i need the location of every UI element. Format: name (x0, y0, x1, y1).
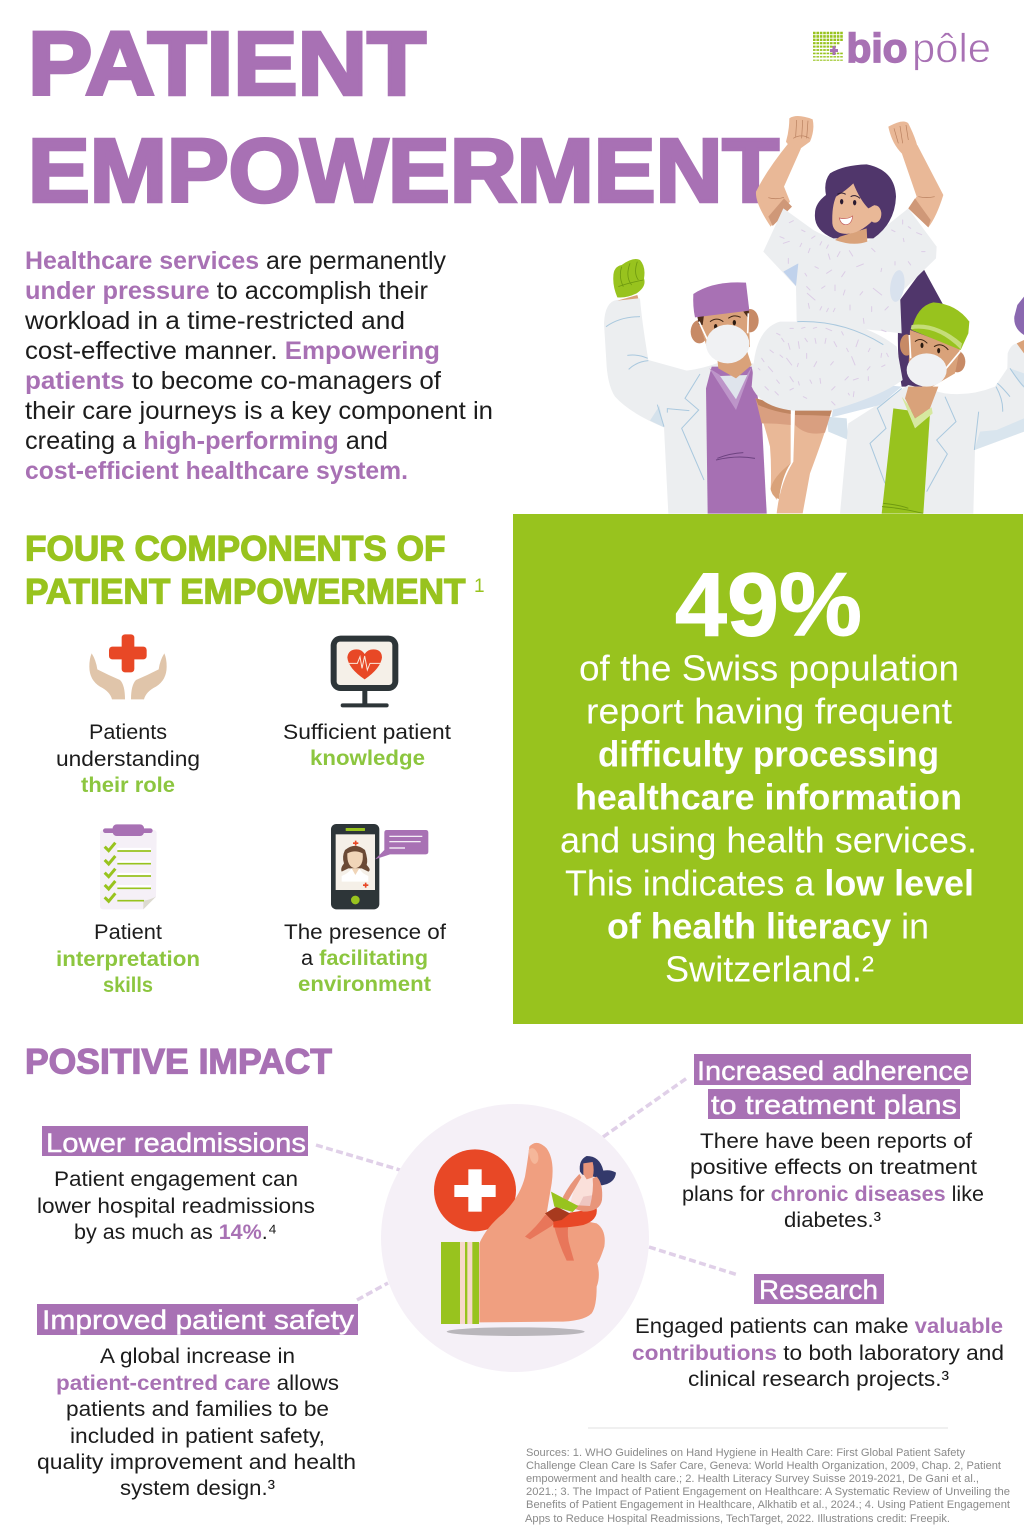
component: patients understanding their role: understanding (56, 747, 200, 771)
component: patients understanding their role (56, 634, 200, 797)
statistic text: difficulty processing (598, 734, 939, 774)
callout: research: contributions to both laboratory and (632, 1341, 1004, 1365)
component: sufficient patient knowledge (283, 636, 451, 770)
logo: biopole: bio (846, 25, 908, 71)
title: EMPOWERMENT (28, 122, 779, 222)
callout: improved patient safety: included in patient safety, (70, 1424, 325, 1448)
left doctor (604, 259, 767, 514)
intro text block: workload in a time-restricted and (24, 307, 405, 335)
callout: improved patient safety: patient-centred care allows (56, 1371, 339, 1395)
icon: monitor with heart (331, 636, 398, 707)
callout: improved patient safety: Improved patient safety (42, 1305, 355, 1335)
logo: biopole (813, 25, 991, 71)
callout: lower readmissions: Lower readmissions (46, 1128, 306, 1158)
arms (756, 143, 801, 227)
callout: increased adherence (682, 1054, 984, 1232)
sources text: Challenge Clean Care Is Safer Care, Geneva: World Health Organization, 2009, Chap. 2, Patient (526, 1460, 1002, 1472)
component: sufficient patient knowledge: knowledge (310, 746, 425, 770)
statistic text (560, 648, 977, 990)
callout: improved patient safety: patients and families to be (66, 1397, 329, 1421)
heading: four components: FOUR COMPONENTS OF (25, 530, 446, 568)
gown pattern dashes (758, 220, 925, 405)
panel: 49% statistic (513, 514, 1023, 1024)
sources text: Sources: 1. WHO Guidelines on Hand Hygiene in Health Care: First Global Patient Safety (526, 1447, 965, 1459)
component: patients understanding their role: Patients (89, 720, 167, 744)
intro text block: Healthcare services are permanently (25, 247, 446, 275)
callout: research: Research (759, 1275, 878, 1305)
component: patient interpretation skills: interpretation (56, 947, 200, 971)
heading: four components (25, 530, 485, 612)
sources text (525, 1447, 1011, 1525)
intro text block: their care journeys is a key component in (25, 397, 493, 425)
callout: improved patient safety: system design.³ (120, 1476, 275, 1500)
shadow (447, 1327, 585, 1336)
component: facilitating environment: The presence of (284, 920, 446, 944)
statistic text: healthcare information (575, 776, 962, 818)
component: facilitating environment: a facilitating (301, 946, 428, 970)
heading: four components: 1 (474, 576, 485, 597)
sources text: Benefits of Patient Engagement in Healthcare, Alkhatib et al., 2024.; 4. Using Patient Engagement (526, 1499, 1011, 1511)
callout: improved patient safety: quality improvement and health (37, 1450, 356, 1474)
title (28, 14, 779, 222)
statistic text: of health literacy in (607, 906, 929, 946)
component: sufficient patient knowledge: Sufficient patient (283, 720, 451, 744)
callout: research: clinical research projects.³ (688, 1367, 949, 1391)
callout: increased adherence: positive effects on treatment (690, 1155, 977, 1179)
sources text: 2021.; 3. The Impact of Patient Engagement on Healthcare: A Systematic Review of Unveiling the (526, 1486, 1010, 1498)
sources text: empowerment and health care.; 2. Health Literacy Survey Suisse 2019-2021, De Gani et al., (526, 1473, 979, 1485)
component: patient interpretation skills: skills (103, 973, 153, 997)
icon: hands holding cross (89, 634, 167, 699)
neck (835, 228, 867, 244)
statistic text: and using health services. (560, 820, 977, 860)
gown (763, 208, 937, 333)
statistic text: report having frequent (586, 690, 952, 732)
callout: lower readmissions: lower hospital readmissions (37, 1194, 315, 1218)
callout: lower readmissions (37, 1126, 315, 1244)
callout: improved patient safety: A global increase in (100, 1344, 295, 1368)
patient long hair behind (898, 268, 943, 387)
hero illustration: patient lifted by doctors (604, 116, 1024, 514)
illustration: thumbs up in circle (381, 1104, 649, 1372)
component: patient interpretation skills (56, 824, 200, 997)
light blue gown shadow (832, 383, 902, 417)
title: PATIENT (28, 14, 426, 114)
callout: increased adherence: Increased adherence (697, 1056, 969, 1086)
hair back (815, 164, 896, 238)
callout: increased adherence: plans for chronic diseases like (682, 1182, 984, 1206)
callout: increased adherence: to treatment plans (711, 1090, 957, 1120)
intro text block: patients to become co-managers of (25, 367, 441, 395)
callout: increased adherence: There have been reports of (700, 1129, 972, 1153)
right doctor (827, 297, 1024, 514)
callout: increased adherence: diabetes.³ (784, 1208, 881, 1232)
face (832, 183, 875, 234)
patient (752, 116, 943, 513)
logo: biopole: pôle (912, 25, 991, 71)
intro text block: cost-efficient healthcare system. (25, 457, 408, 485)
big number: 49% (675, 556, 862, 656)
intro text block (24, 247, 493, 485)
intro text block: creating a high-performing and (25, 427, 388, 455)
sources text: Apps to Reduce Hospital Readmissions, TechTarget, 2022. Illustrations credit: Freepik. (525, 1513, 950, 1525)
callout: lower readmissions: Patient engagement can (54, 1167, 298, 1191)
thumb hand (479, 1143, 605, 1322)
red cross badge (434, 1149, 516, 1231)
intro text block: cost-effective manner. Empowering (25, 337, 440, 365)
heading: positive impact: POSITIVE IMPACT (25, 1042, 332, 1082)
component: facilitating environment: environment (298, 972, 431, 996)
component: patient interpretation skills: Patient (94, 920, 162, 944)
heading: four components: PATIENT EMPOWERMENT (25, 572, 465, 612)
callout: research: Engaged patients can make valuable (635, 1314, 1003, 1338)
statistic text: This indicates a low level (565, 862, 974, 904)
component: facilitating environment (284, 824, 446, 996)
intro text block: under pressure to accomplish their (25, 277, 428, 305)
statistic text: Switzerland.² (665, 948, 874, 990)
callout: improved patient safety (37, 1304, 358, 1500)
woman sitting on thumb (525, 1156, 616, 1261)
legs (756, 398, 791, 500)
icon: phone with nurse and speech bubble (331, 824, 428, 909)
statistic text: of the Swiss population (579, 648, 959, 688)
component: patients understanding their role: their role (81, 773, 175, 797)
callout: lower readmissions: by as much as 14%.⁴ (74, 1220, 277, 1244)
icon: checklist clipboard (100, 824, 157, 909)
cuff (441, 1242, 479, 1324)
callout: research (632, 1274, 1004, 1391)
